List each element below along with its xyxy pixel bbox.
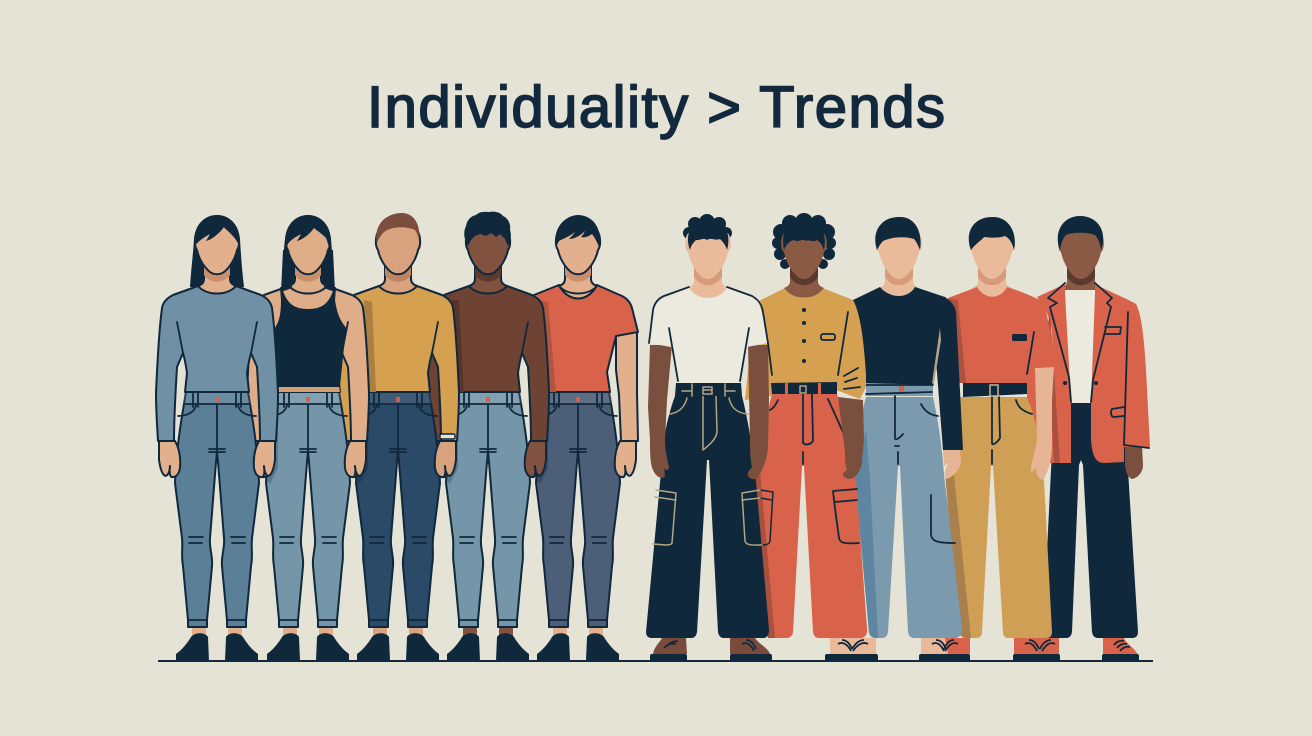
shoes — [825, 638, 878, 661]
ground line — [158, 660, 1153, 662]
shoes — [1102, 638, 1139, 661]
figure 8: black long sleeve, blue trousers — [853, 217, 970, 661]
shoes — [945, 638, 1060, 661]
cargo pockets — [653, 396, 762, 545]
blazer left panel — [1037, 284, 1071, 463]
figure 3: mustard long sleeve, dark jeans — [337, 213, 459, 661]
group: uniform skinny-jeans figures — [156, 212, 638, 661]
figure 7: mustard henley, orange cargo trousers — [745, 213, 878, 661]
figure 10: orange blazer, white tee, navy trousers — [1025, 216, 1150, 661]
figure 5: orange tee, slate jeans — [522, 215, 638, 661]
figure 2: black tank, light jeans — [247, 215, 369, 661]
figure 1: blue long sleeve, mid jeans — [156, 215, 278, 661]
curly hair front — [688, 218, 728, 250]
blazer right panel — [1091, 284, 1150, 463]
group: individual flat figures — [646, 213, 1150, 661]
curly hair back — [683, 214, 732, 246]
figure 6: white tee, navy cargo trousers — [646, 214, 772, 661]
long hair back — [281, 215, 335, 300]
jacket details — [1048, 283, 1149, 448]
shoes — [919, 638, 970, 661]
figure 9: orange tee, mustard trousers — [945, 217, 1060, 661]
belt — [963, 383, 1027, 397]
afro hair back — [772, 213, 836, 269]
arms — [648, 345, 769, 479]
figure 4: brown long sleeve, light jeans — [427, 212, 549, 661]
shoes — [650, 638, 772, 661]
afro hair front — [783, 218, 825, 250]
title: Individuality > Trends — [367, 75, 945, 140]
